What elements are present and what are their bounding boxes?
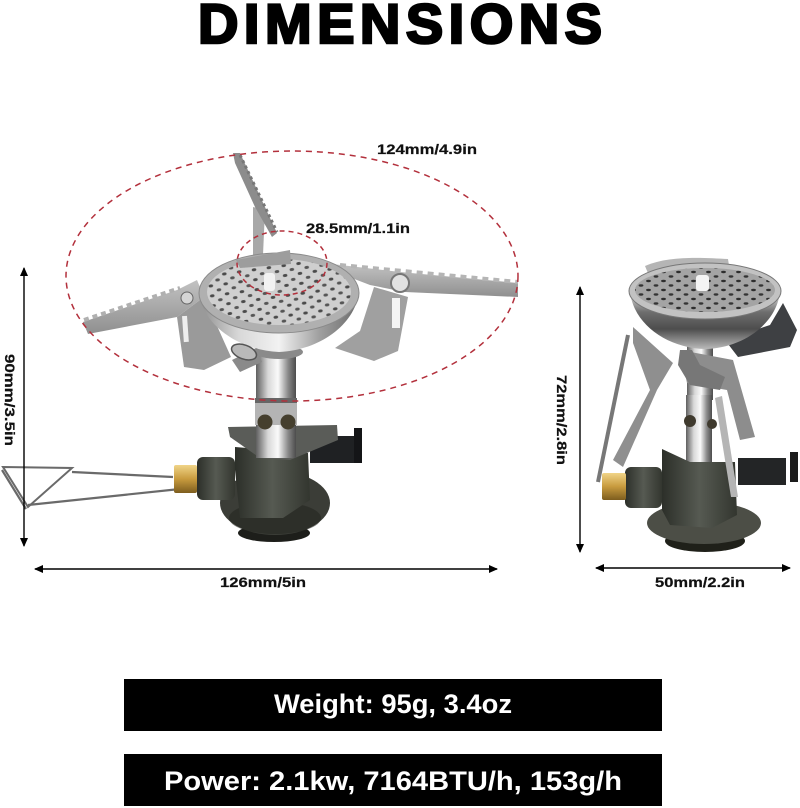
base disk — [647, 502, 761, 552]
top arm — [233, 153, 277, 255]
rear square block — [310, 428, 362, 463]
arrow: left stove width — [35, 568, 497, 570]
power bar: Power: 2.1kw, 7164BTU/h, 153g/h — [164, 766, 622, 796]
weight bar: Weight: 95g, 3.4oz — [274, 689, 512, 719]
fuel block — [235, 447, 310, 518]
label: right stove height: 72mm/2.8in — [554, 375, 569, 465]
left stove: side view — [2, 153, 518, 542]
fuel block — [662, 449, 737, 528]
dashed circle: inner burner diameter — [237, 231, 327, 295]
stem — [255, 345, 297, 458]
square block — [738, 452, 798, 485]
rear plate — [680, 350, 755, 440]
burner bowl — [199, 250, 359, 372]
left arm — [83, 280, 231, 370]
wire pot-support handle — [2, 467, 180, 509]
stem — [684, 395, 717, 470]
label: outer diameter: 124mm/4.9in — [377, 142, 477, 157]
label: left stove height: 90mm/3.5in — [2, 354, 17, 446]
front plate — [678, 350, 725, 390]
neck — [687, 340, 713, 400]
label: right stove width: 50mm/2.2in — [655, 575, 745, 590]
right stove: folded view — [598, 258, 798, 552]
wire handle — [598, 335, 628, 482]
burner bowl — [629, 258, 781, 349]
arrow: right stove height — [579, 287, 581, 552]
long vertical arm — [715, 396, 738, 497]
dashed circle: outer pot support diameter — [66, 151, 518, 401]
mounting plate — [228, 425, 338, 460]
brass valve — [174, 465, 197, 493]
weight bar — [124, 679, 662, 731]
label: inner diameter: 28.5mm/1.1in — [306, 221, 410, 236]
regulator collar — [197, 457, 235, 500]
label: left stove width: 126mm/5in — [220, 575, 306, 590]
power bar — [124, 754, 662, 806]
folded left arm — [613, 327, 673, 467]
collar — [625, 467, 662, 508]
arrow: left stove height — [23, 268, 25, 546]
right arm — [332, 264, 518, 361]
brass valve — [602, 473, 626, 500]
upper-right dark arm — [725, 303, 797, 357]
base disk — [220, 471, 330, 542]
arrow: right stove width — [596, 567, 790, 569]
